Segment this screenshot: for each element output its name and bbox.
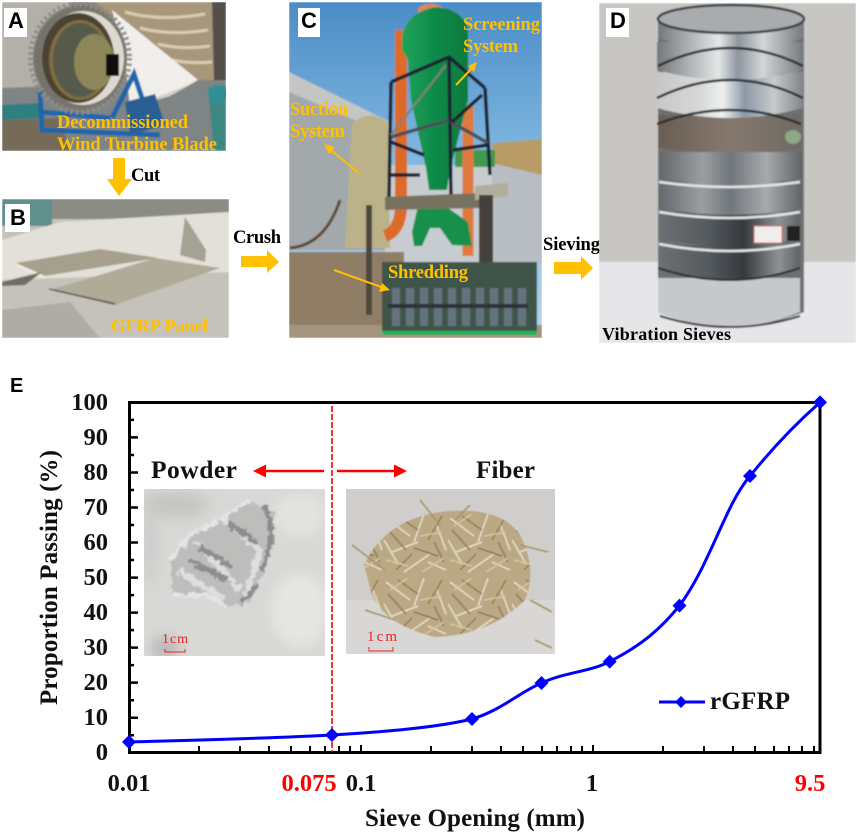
y-axis tick labels: 20: [84, 669, 108, 696]
label: Decommissioned Wind Turbine Blade: [57, 113, 217, 155]
badge A: [4, 8, 27, 37]
x-axis tick labels: [108, 770, 825, 797]
panel E label: E: [10, 375, 23, 397]
label: Suction System: [290, 100, 349, 142]
x-axis title: Sieve Opening (mm): [365, 805, 585, 832]
badge B: [5, 204, 30, 232]
x-axis tick labels: 0.01: [108, 770, 150, 797]
x-axis tick labels: 0.075: [281, 770, 337, 797]
data series: rGFRP curve: [122, 395, 827, 749]
badge B: B: [10, 205, 26, 230]
photo: fiber: [346, 489, 555, 654]
scale bar: 1cm: 1cm: [162, 632, 188, 647]
arrow: towards fiber: [337, 464, 407, 478]
badge C: [298, 8, 320, 37]
legend: rGFRP: rGFRP: [710, 688, 790, 715]
y-axis tick labels: 70: [84, 494, 108, 521]
label: Vibration Sieves: Vibration Sieves: [602, 324, 731, 344]
y-axis tick labels: 50: [84, 564, 108, 591]
label: Sieving: Sieving: [543, 235, 601, 255]
label: Powder: Powder: [151, 455, 237, 484]
badge D: D: [610, 8, 626, 33]
x-axis tick labels: 0.1: [346, 770, 376, 797]
label: Screening System: [463, 15, 541, 57]
label: Suction System: System: [290, 122, 346, 142]
label: Screening System: System: [463, 37, 519, 57]
photo: powder: [141, 489, 328, 660]
arrow: screening pointer: [456, 62, 477, 85]
arrow: towards powder: [253, 464, 324, 478]
panel A: decommissioned wind turbine blade photo: [2, 2, 228, 155]
scale bar: 1cm: 1cm: [367, 629, 397, 645]
label: Decommissioned Wind Turbine Blade: Wind Turbine Blade: [57, 135, 217, 155]
label: Crush: Crush: [233, 228, 282, 248]
label: Shredding: Shredding: [388, 263, 469, 283]
label: Cut: Cut: [131, 166, 161, 186]
y-axis tick labels: 40: [84, 599, 108, 626]
boundary line at 0.075 mm: [331, 406, 333, 752]
label: Screening System: Screening: [463, 15, 541, 35]
y-axis tick labels: 60: [84, 529, 108, 556]
y-axis tick labels: 80: [84, 459, 108, 486]
x-axis tick labels: 9.5: [795, 770, 825, 797]
badge C: C: [301, 8, 317, 33]
chart: proportion passing vs sieve opening: [36, 389, 827, 832]
arrow: shredding pointer: [334, 270, 390, 292]
plot frame and axes: [129, 402, 820, 752]
arrow: crush: [241, 250, 279, 273]
label: GFRP Panel: GFRP Panel: [111, 317, 208, 337]
badge A: A: [8, 8, 24, 33]
y-axis tick labels: 0: [96, 739, 108, 766]
y-axis tick labels: 90: [84, 424, 108, 451]
x-axis tick labels: 1: [586, 770, 598, 797]
arrow: cut: [107, 158, 132, 196]
y-axis tick labels: [71, 389, 108, 766]
arrow: sieving: [554, 256, 593, 280]
arrow: suction pointer: [324, 144, 359, 173]
label: Decommissioned Wind Turbine Blade: Decommissioned: [57, 113, 189, 133]
y-axis tick labels: 100: [71, 389, 108, 416]
y-axis tick labels: 30: [84, 634, 108, 661]
panel D: vibration sieves photo: [599, 3, 856, 344]
panel B: GFRP panel photo: [2, 199, 229, 338]
label: Fiber: Fiber: [476, 457, 535, 484]
legend: rGFRP: [659, 688, 790, 715]
panel C: shredding and screening plant photo: [289, 2, 542, 338]
y-axis title: Proportion Passing (%): [36, 450, 63, 705]
y-axis tick labels: 10: [84, 704, 108, 731]
badge D: [606, 8, 629, 37]
label: Suction System: Suction: [290, 100, 349, 120]
